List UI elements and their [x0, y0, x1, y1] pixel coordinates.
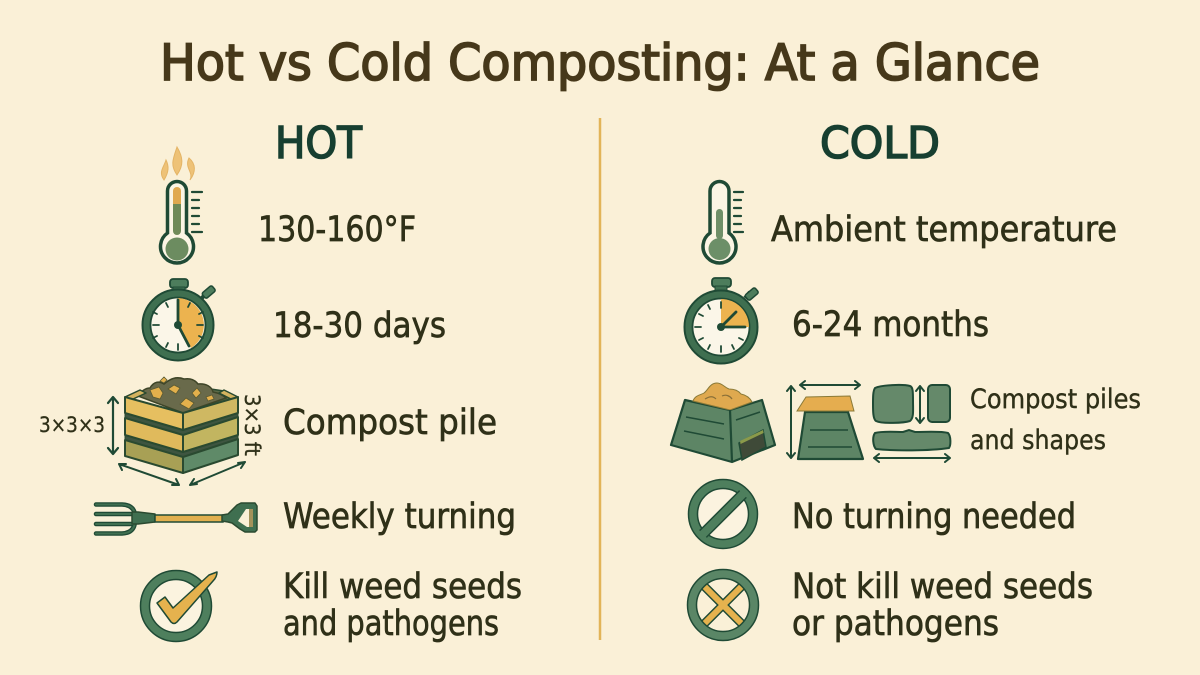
icon: garden fork [96, 503, 257, 534]
panel: cold composting [671, 118, 1141, 644]
icon: hot stopwatch [142, 279, 216, 360]
icon: compost bin [671, 383, 775, 462]
icon: wooden compost crate with dimensions: 3×3×3 [39, 413, 105, 437]
text: cold drawback [792, 567, 1093, 644]
text: cold turning: No turning needed [792, 497, 1076, 537]
icon: cold thermometer [703, 182, 743, 263]
heading: COLD: COLD [820, 118, 940, 169]
text: cold piles: and shapes [970, 425, 1106, 456]
text: cold duration: 6-24 months [792, 305, 989, 345]
title: Hot vs Cold Composting: At a Glance [160, 34, 1040, 92]
panel: hot composting [39, 118, 522, 644]
text: cold piles [970, 384, 1141, 456]
icon: check mark circle [145, 572, 217, 637]
icon: tall pile with dimension arrows [787, 381, 863, 459]
text: cold drawback: Not kill weed seeds [792, 567, 1093, 607]
icon: no turning symbol [693, 484, 753, 544]
text: hot turning: Weekly turning [283, 497, 516, 537]
icon: pile shapes with dimension arrows [873, 385, 950, 462]
icon: hot thermometer with steam [161, 147, 202, 263]
text: hot benefit: and pathogens [283, 604, 499, 644]
text: hot pile: Compost pile [283, 403, 497, 443]
icon: x mark circle [692, 574, 754, 636]
text: cold piles: Compost piles [970, 384, 1141, 415]
text: hot temperature: 130-160°F [258, 210, 416, 250]
text: hot benefit [283, 567, 522, 644]
text: cold temperature: Ambient temperature [771, 210, 1117, 250]
divider between hot and cold columns [599, 118, 601, 640]
icon: wooden compost crate with dimensions [39, 377, 264, 485]
icon: cold stopwatch [684, 278, 759, 364]
text: hot duration: 18-30 days [273, 306, 446, 346]
text: cold drawback: or pathogens [792, 604, 999, 644]
icon: wooden compost crate with dimensions: 3×3 ft [240, 394, 264, 456]
text: hot benefit: Kill weed seeds [283, 567, 522, 607]
heading: HOT: HOT [275, 118, 362, 169]
